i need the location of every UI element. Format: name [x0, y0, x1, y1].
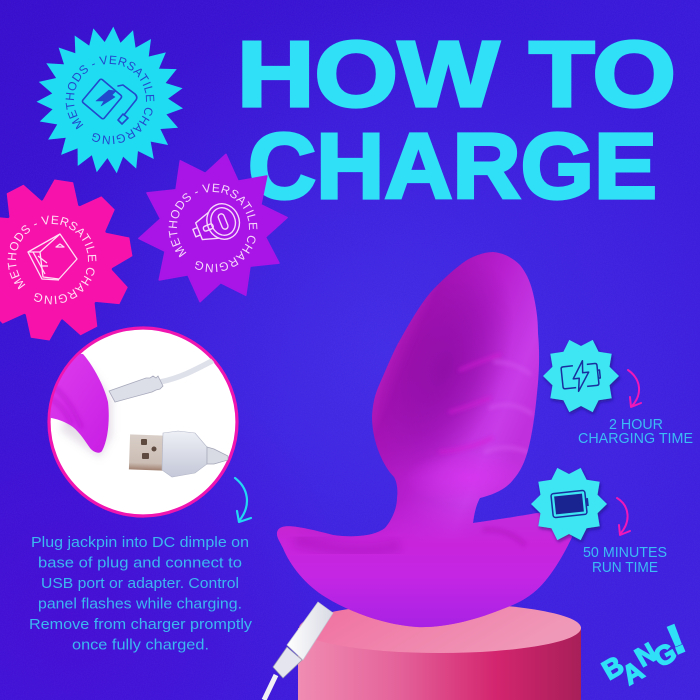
usb metal tip — [129, 434, 164, 471]
icon: laptop — [28, 234, 77, 280]
starburst — [543, 340, 619, 412]
text block: instructions — [29, 534, 253, 654]
title line: charge: CHARGE — [248, 114, 657, 218]
jack connector — [287, 602, 333, 660]
badge ring text: METHODS - VERSATILE CHARGING — [8, 216, 96, 304]
photo circle — [49, 328, 237, 516]
ridges — [440, 355, 532, 452]
stat: charging time — [543, 340, 693, 447]
label: RUN TIME — [592, 559, 658, 576]
badge: car charger — [138, 154, 288, 302]
icon: car charger — [188, 199, 245, 250]
jack cable — [160, 361, 212, 382]
text block: instructions: panel flashes while charging. — [38, 596, 242, 612]
product: charging cable — [264, 602, 333, 700]
plug base close-up — [50, 354, 109, 453]
arrow — [617, 498, 630, 535]
badge ring text: METHODS - VERSATILE CHARGING — [66, 56, 154, 144]
text block: instructions: Plug jackpin into DC dimple on — [31, 534, 249, 551]
logo: bang: ! — [662, 617, 691, 663]
base colour — [277, 510, 572, 628]
badge: power bank charging — [36, 26, 183, 174]
cable — [264, 675, 276, 700]
logo: bang: A — [617, 655, 649, 691]
shadow on left wing of base — [295, 540, 400, 550]
product: pedestal — [298, 603, 581, 700]
arrow: cyan down to instructions — [235, 478, 251, 522]
strain relief — [273, 647, 302, 678]
plug shading — [277, 283, 572, 628]
logo: bang — [597, 617, 691, 691]
product: purple plug — [276, 252, 572, 628]
panel: charging photo — [40, 328, 237, 516]
label: 2 HOUR — [609, 416, 663, 433]
jack connector — [109, 376, 163, 402]
label — [583, 544, 667, 576]
icon: full battery — [551, 490, 590, 518]
soft shadow of plug — [60, 365, 112, 458]
pedestal top — [299, 603, 581, 653]
badge: laptop usb charging — [0, 180, 132, 340]
dimple on base — [483, 530, 525, 545]
logo: bang: N — [630, 637, 662, 673]
label: 50 MINUTES — [583, 544, 667, 561]
text block: instructions: Remove from charger promptly — [29, 616, 253, 633]
plug ridges — [50, 385, 82, 428]
logo: bang: G — [648, 637, 682, 673]
title line: how to: HOW TO — [237, 22, 676, 126]
stat: run time — [531, 468, 667, 576]
purple starburst — [129, 147, 297, 309]
usb contact holes — [141, 439, 156, 459]
arrow — [628, 370, 641, 407]
text block: instructions: base of plug and connect to — [38, 554, 242, 572]
cyan starburst — [33, 23, 187, 177]
starburst — [531, 468, 607, 540]
label: CHARGING TIME — [578, 430, 693, 447]
usb plug body — [162, 431, 207, 477]
photo contents — [40, 352, 228, 477]
pink gear — [0, 169, 144, 351]
logo: bang: B — [597, 650, 629, 686]
text block: instructions: USB port or adapter. Control — [41, 575, 239, 592]
label — [578, 416, 693, 447]
badge ring text: METHODS - VERSATILE CHARGING — [168, 184, 258, 272]
plug silhouette — [277, 252, 572, 627]
usb strain relief — [207, 447, 228, 464]
icon: charging battery — [561, 359, 601, 393]
badge — [543, 340, 619, 412]
text block: instructions: once fully charged. — [72, 636, 209, 654]
bright bulb bottom — [428, 464, 518, 498]
icon: power bank with bolt — [82, 79, 137, 124]
dark shade on upper body — [394, 283, 504, 460]
pedestal side — [298, 628, 581, 700]
title — [237, 22, 676, 218]
badge — [531, 468, 607, 540]
